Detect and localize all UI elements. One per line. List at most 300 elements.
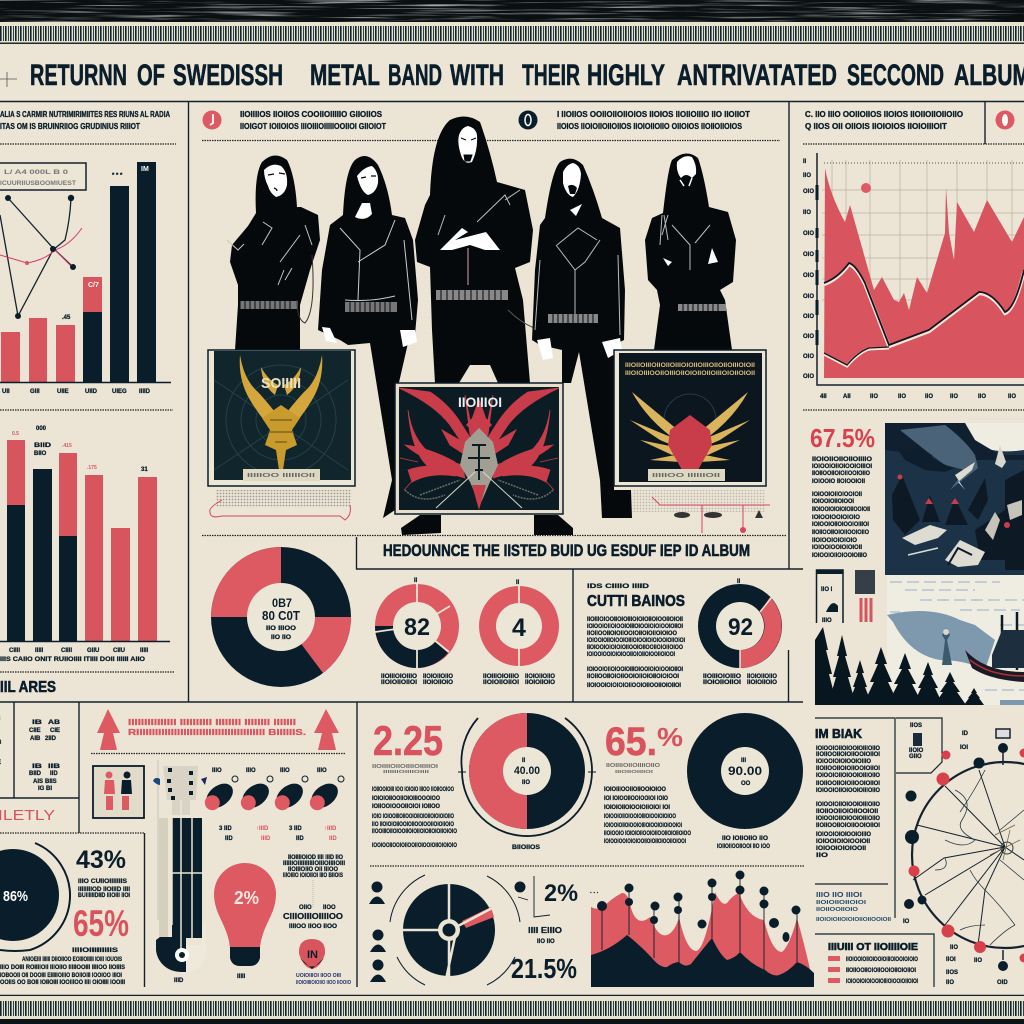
chart: donut 92: IIOIOIIOIIO xyxy=(747,674,777,680)
icon: crosshair xyxy=(0,72,17,87)
small stat cells: IB xyxy=(32,764,43,770)
album cover 1: gold: IIIIIOO IIIIIIOII xyxy=(247,473,316,479)
album cover 2: red: IIOIIIOI xyxy=(458,394,502,410)
icons: guitar picks: ↑IIID xyxy=(324,826,337,832)
chart: lower left stacked bars xyxy=(0,426,170,663)
heading: lower left: IIL ARES xyxy=(0,679,56,696)
album cover 1: gold: SOIIIII xyxy=(261,375,301,392)
panel: lower right text: IIOIIOOIIOIOIIOOIOIIOI xyxy=(816,752,880,758)
icon: red note badge xyxy=(202,110,222,130)
stat: 2.25: IIOOIIIOIIOIOOIIOIOIIOIOIIOIOIIOIOIO xyxy=(372,829,457,835)
panel: lower left donut with stats xyxy=(0,843,130,986)
chart: lower left stacked bars: CIIII xyxy=(9,648,20,654)
icon: dark O badge xyxy=(518,110,538,130)
chart: split donut with arc: BIIOIIOS xyxy=(512,845,540,851)
title: ANTRIVATATED xyxy=(677,59,837,92)
chart: donut 4: IIOIOIIOIO xyxy=(525,680,555,686)
panel: lower left donut with stats: OOIIS OO BOII IOIIOIII IOOIIIOO IIII OIOIIII IOOIII xyxy=(0,980,125,986)
chart: large donut: 0B7 xyxy=(272,596,292,610)
title: HIGHLY xyxy=(587,59,665,92)
chart: top right area chart: IIO xyxy=(803,210,811,216)
chart: large donut: IIO IIIOO xyxy=(266,626,296,632)
icon: pick badge: IN xyxy=(307,949,318,961)
chart: top left bars with line overlay: C/7 xyxy=(88,282,99,289)
icons: guitar picks: 3 IID xyxy=(289,826,302,832)
text block: guitar notes: IIOIIIIOIOD IIII IIID IIO xyxy=(288,855,343,861)
icons: guitar picks: IIIO xyxy=(246,768,256,774)
chart: donut 82: IIOIOIIOIO xyxy=(423,680,453,686)
heading: second album banner: HEDOUNNCE THE IISTED BUID UG ESDUF IEP ID ALBUM xyxy=(383,541,750,560)
chart: top right area chart: OIO xyxy=(803,273,814,279)
panel: lower right text: IOIOOIOIIOIOOIOIIIOIIO xyxy=(816,773,880,779)
small stat cells: 2IID xyxy=(45,736,57,742)
legend box: IIOIIOOIIOIOIIOOIOIIOIOIIOI xyxy=(846,968,916,974)
icons: guitar picks: IIIO xyxy=(212,768,222,774)
chart: dark donut: IOIIOIIOOIIOOI IIO IOO xyxy=(717,844,770,850)
red labels under cover 1 xyxy=(210,490,351,520)
stat: 65%: IIOIOOIO IOIOIOIIOOIOIIOOIIOIOIIOIOO xyxy=(604,831,691,837)
stat: 65%: IOI IOIOOIIOOIOOIOI IOIO xyxy=(604,796,668,802)
chart: top right area chart: II xyxy=(803,159,807,165)
panel: lower right text: IIOIOIOIIOIOIOIIOIIOOIOII xyxy=(816,917,892,923)
panel: band members xyxy=(227,116,736,535)
text block: center captions and icons: IIOIGOT IOIIOIOS IIIOIIIOIIIIIOOIIOI GIIOIOT xyxy=(240,122,386,131)
small stat cells: IB xyxy=(32,720,43,726)
stat: 2.25: IOIO IOIOOIIIOIIOOIOIIOIOIIOIOIOIOIIO xyxy=(372,814,454,820)
title: SWEDISSH xyxy=(173,59,283,92)
chart: lower left stacked bars: 000 xyxy=(36,426,47,432)
small stat cells: AIS xyxy=(33,779,43,785)
panel text: Cutti Bainos: IIOIOOIOIOIOIOIIOOIOIIOOIIOIOIIOI xyxy=(587,683,681,689)
panel text: Cutti Bainos: IOIOOIOIIOIOOIOIIIOIOOIOIOIOOIOIIOI xyxy=(587,624,683,630)
small stat cells: AB xyxy=(48,720,61,726)
chart: dark donut xyxy=(687,713,803,850)
chart: top right area chart: OIO xyxy=(803,252,814,258)
chart: circular network map xyxy=(903,729,1024,986)
text block: top right intro xyxy=(805,110,963,131)
chart: circular network map: IIO xyxy=(974,958,982,964)
text block: guitar notes: IIIOIIIO IOIOIIOI IIIO BIIOIS xyxy=(283,873,343,879)
stat: 2.25: IOIIOOIOOOIIOIOI IOIIOO xyxy=(372,804,440,810)
chart: lower left stacked bars: BIIO xyxy=(34,451,47,457)
text block: center captions and icons: IIOIOS IIOIOIIOIIOIIOS IIOIOIIOIIO OIIOIOS IIOIIOIIOIOS xyxy=(557,122,743,131)
legend box: IIIUIII OT IIOIIIIOIE xyxy=(828,942,918,953)
text block: guitar notes: IIIIOO IIOO IIOO xyxy=(289,924,337,930)
chart legend box: L/ A4 000L B 0 xyxy=(4,170,69,176)
icon: two figures box xyxy=(93,766,144,818)
panel text: Cutti Bainos xyxy=(587,584,685,689)
chart: top left bars with line overlay: UIEG xyxy=(112,389,127,395)
chart: donut 82: IIOIIIOIOIIIO xyxy=(381,674,417,680)
chart: lower left stacked bars: IIIS CAIIO ONIT RUIIOIIII ITIIII DOII IIIIII AIIO xyxy=(0,657,145,663)
stat: 67.5%: IOIOOIOIIOIOOI xyxy=(812,499,854,505)
chart: donut 4 xyxy=(479,580,559,686)
chart: donut 82: IIOIOIIOIIOI xyxy=(381,680,417,686)
stat: 67.5%: IIOIIOOIIOIOIIOOIOIIO xyxy=(812,471,870,477)
icons: guitar picks: IID xyxy=(225,836,233,842)
chart: donut 4: IIOIOIIOIIO xyxy=(525,674,555,680)
chart: top right area chart: 4II xyxy=(820,394,827,400)
annotations under cover 3 xyxy=(632,490,770,533)
chart: lower left stacked bars: GIIU xyxy=(87,648,99,654)
title: OF xyxy=(137,59,165,92)
small stat cells: CIIE xyxy=(29,728,41,734)
stat: 67.5%: IIOIOOIOIOIOIOIIOOIOII xyxy=(812,507,870,513)
chart: donut 4: IIOIIIOIOIIIO xyxy=(483,674,519,680)
icons: people xyxy=(369,882,386,982)
halftone texture xyxy=(0,102,803,864)
panel text: Cutti Bainos: IIOIIIOIOOIIOIOIIIOIOIOIIOIOOIIOIOII xyxy=(587,617,683,623)
chart: top right area chart xyxy=(803,153,1024,400)
chart: large donut: IIO IIO xyxy=(271,635,291,641)
panel: lower right text: IIO xyxy=(816,853,828,859)
album cover 3: gold red: IIIOIIOIIIOIIOIIOIIIOIOIIOIIIOIIOIIOIIIOIOII xyxy=(625,363,755,369)
chart: circular network map: IIO xyxy=(946,980,954,986)
chart: top right area chart: IIO xyxy=(870,394,878,400)
illustration: dark battle landscape xyxy=(885,423,1024,575)
illustration: pine trees xyxy=(815,627,984,705)
panel: lower right text: IM BIAK xyxy=(815,726,863,741)
panel: lower right text: IIOIIOOIIOIOIIOOIOIIOI xyxy=(816,823,880,829)
chart: top left bars with line overlay xyxy=(0,162,171,395)
chart: split donut with arc: II xyxy=(522,758,526,764)
text block: top left intro: ALIA S CARMIR NUTRIMIRIMIITES RES RIUNS AL RADIA xyxy=(0,110,170,119)
panel: lower left donut with stats: IIIO DOIII ROIIIIOII IIIOIIO IIIIIOOIII IIIIOO IIOIIIS xyxy=(0,965,125,971)
chart: split donut with arc: 40.00 xyxy=(514,765,540,777)
stat: 65%: IOIOOIOIIOIOOIOIIIOIOOIOIOIOOIOI xyxy=(604,823,682,829)
title: SECCOND xyxy=(847,59,944,92)
chart: top right area chart: OIO xyxy=(803,294,814,300)
icon: light bulb: IIIII xyxy=(237,974,246,980)
icon: light bulb xyxy=(214,863,276,980)
band member 4 xyxy=(532,159,632,518)
text block: guitar notes: IIIIIIOIIIIIIIIIIOIIIOIIIIOIII xyxy=(283,861,345,867)
red text heading xyxy=(128,717,306,737)
panel: lower left donut with stats: BUIIIIIIDIID IIIOIII IIOI xyxy=(78,893,130,899)
panel text: Cutti Bainos: IIOIOOIOIOIOIOIIOOIOIIOOIIOIOIIOIOO xyxy=(587,645,683,651)
bottom barcode border xyxy=(0,996,1024,1019)
icon: guitar: IIID xyxy=(174,978,184,984)
stat: 65% xyxy=(604,720,691,845)
chart: circular network map: OID xyxy=(997,980,1008,986)
band member 5 xyxy=(645,153,736,350)
small figure card: IIOIO xyxy=(909,748,924,754)
text block: guitar notes: CIIIOIIIOIIIIOO xyxy=(283,912,343,921)
icon: light bulb: 2% xyxy=(234,888,259,908)
small figure card: GIIO xyxy=(909,754,922,760)
panel: lower right text: IIOIOIIOIIOIOI xyxy=(816,900,867,906)
panel: lower right text: IIOIIOOIIOIOIIOOIOIIOI xyxy=(816,766,880,772)
title: THEIR xyxy=(522,59,580,92)
small figure card: IIOS xyxy=(910,723,922,729)
stat: 67.5% xyxy=(810,423,875,559)
stat: 2.25: IIOIIIIOIIOIIIIOIIIIIOI xyxy=(372,764,439,770)
title xyxy=(30,59,1024,92)
stat: 2.25: IIIIIIIOIIIIOIIII xyxy=(383,769,429,774)
panel: lower right text: IOIOOIOIOIOOIOIIIO xyxy=(816,759,871,765)
panel: lower left donut with stats: IIIIIIIIOD IIOIIID IIII xyxy=(78,887,130,893)
stat: 65%: IIOIIIIOIIOIIIIOIIO xyxy=(606,763,660,769)
stats: 2% and 21.5% xyxy=(511,876,578,984)
chart: split donut with arc xyxy=(458,713,596,851)
panel text: Cutti Bainos: IIOIIOOIIOIOIIOOIOIIOIOIIOIOIOO xyxy=(587,631,677,637)
chart: top left bars with line overlay: IIIID xyxy=(139,389,151,395)
stat: 65%: IIIOIIOIIIIOI xyxy=(615,769,653,774)
chart: top left bars with line overlay: UIIE xyxy=(57,389,69,395)
small figure card xyxy=(896,718,942,773)
stat: 67.5%: IOIOOIOIIOIOOIOIIIOI xyxy=(812,464,872,470)
stat: 2.25: IIO IIOIOIOIIOOIOIIOOIOOIIOIOIIOIO xyxy=(372,822,454,828)
icon: red badge xyxy=(996,110,1014,130)
stat: 65%: IOIOOIOOIOIOIOOIIOIOIIOIOOIIOIOOI xyxy=(604,839,686,845)
legend box: IIOIOOIOIIOIOOIOIIIOIOOIOIOIO xyxy=(846,957,918,963)
text block: center captions and icons: I IIOIIOS OOIIOIIOIIOIOS IIOIOS IIOIIOIIIO IIO IIOIIOT xyxy=(557,110,750,119)
chart: top left bars with line overlay: .45 xyxy=(62,315,71,321)
stat: 67.5%: IOIOOIOIIOIOOIOII xyxy=(812,492,862,498)
stat: 65%: IOIOIOIIOIOOIOIIOIOI IOI xyxy=(604,805,670,811)
icon: pick badge: UOIOIIIOI IIOO OIII xyxy=(296,973,342,979)
panel: lower right text: IIIO IIO IIIOI xyxy=(816,892,862,899)
album cover 3: gold red: IIIIIOO IIIIIIOII xyxy=(652,473,721,479)
small stat cells: AIB xyxy=(30,736,41,742)
legend box xyxy=(815,934,934,987)
title: WITH xyxy=(450,59,504,92)
chart: top right area chart: OIO xyxy=(803,354,814,360)
stat: 65%: IOIOIIIOOIIOIIOOIOIOO xyxy=(604,787,666,793)
panel: lower right text: IOIOOIOIIOIOOIOIIIOIIO xyxy=(816,816,880,822)
icons: guitar picks: IIIO xyxy=(280,768,290,774)
icon: pick badge xyxy=(296,939,351,986)
panel text: Cutti Bainos: IOIOOIOIIOIOOIOIIIOIOOIOIOIOOIOIIOIOI xyxy=(587,638,685,644)
chart: mountain area with pins: . . . xyxy=(590,889,599,895)
chart: circular network map: IOI xyxy=(960,745,968,751)
small stat cells: IID xyxy=(50,771,58,777)
icons: guitar picks: 3 IID xyxy=(219,826,232,832)
small poster icon xyxy=(816,570,875,624)
chart: top left bars with line overlay: GIII xyxy=(30,389,40,395)
small stat cells: BIID xyxy=(29,771,42,777)
chart: donut 4: II xyxy=(516,580,520,586)
panel text: Cutti Bainos: IIOIIOOIIOIOIIOOIOIIOIOIIOIOIOOI xyxy=(587,674,679,680)
stats: 2% and 21.5%: IIO IIO xyxy=(537,939,555,945)
chart: large donut xyxy=(211,547,351,687)
chart: lower left stacked bars: IIIII xyxy=(140,648,149,654)
chart: donut 92 xyxy=(698,579,782,686)
panel: lower right text: IOIOOIOIIOIOOIOIIIOIIO xyxy=(816,788,880,794)
text block: top right intro: Q IIOS OII OIIOIS IIOIOIOS IIOIOIIIOIT xyxy=(805,122,947,131)
chart: donut 92: IIOIIIOIOIIIO xyxy=(703,674,741,680)
chart: top left bars with line overlay: * * * xyxy=(112,173,123,179)
panel: lower left donut with stats: ANIOEIII IIIIII DIIOIIOO EOIIIOIIIII IOIII IOUOIS xyxy=(22,957,122,963)
legend box: IOIOOIOIOIOOIOIIIOIOOIOIIOIOI xyxy=(846,979,918,985)
chart: lower left stacked bars: .175 xyxy=(87,465,97,471)
icons: guitar picks: IIIO xyxy=(317,768,327,774)
panel: lower left donut with stats: IIIIOIIIIIIIIIS xyxy=(72,948,118,954)
chart: top right area chart: OIO xyxy=(803,374,814,380)
text block: top right intro: C. IIO IIIO OOIIOIIOS IIOIOS IIOIIOIIOIIOIIO xyxy=(805,110,963,119)
stats: 2% and 21.5%: IIII EIIIO xyxy=(528,926,562,935)
chart: top left bars with line overlay: IM xyxy=(141,166,149,173)
text block: guitar notes: IIOO xyxy=(323,905,336,911)
panel: lower left donut with stats: IOBOOII OII DOOIII EIIIIIOIIIO BOIIOIII IOOIOO IIIOI xyxy=(0,973,122,979)
chart: top right area chart: IIO xyxy=(950,394,958,400)
chart: donut 82 xyxy=(375,578,459,686)
chart: lower left stacked bars: 31 xyxy=(141,467,148,473)
panel text: Cutti Bainos: IOIOOIOIIOIOOIOIIIOIOOIOIOIOOIOIIOI xyxy=(587,667,683,673)
chart: top right area chart: IIO xyxy=(978,394,986,400)
album cover 2: red xyxy=(395,383,563,514)
band member 3 xyxy=(401,116,573,535)
stat: 67.5%: IIOIOOIOIOIOIO xyxy=(812,538,857,544)
chart: donut 92: II xyxy=(737,579,741,585)
illustration: sea with ship xyxy=(887,575,1024,705)
icons: guitar picks: IID xyxy=(329,836,337,842)
text block: top left intro xyxy=(0,110,170,131)
stat: 2.25: IOIIOOIOIII IOO IOIOIO IIIOO IIOIIOOIOO xyxy=(372,787,454,793)
text block: guitar notes: OIIO xyxy=(299,905,312,911)
stat: 67.5%: IIOIIOOIIOIOIIOOIOIIO xyxy=(812,530,869,536)
chart: split donut with arc: IIO xyxy=(522,780,530,786)
stat: 65%: % xyxy=(657,722,683,752)
chart: dark donut: III xyxy=(741,758,746,764)
chart: circular network map: IIO xyxy=(950,945,958,951)
chart legend box xyxy=(0,163,86,190)
album cover 1: gold xyxy=(208,350,355,486)
album cover 3: gold red: IIIOIOIIIOOIIOIIIOIIOIOIIOIIOIIIOIOIIOIOII xyxy=(625,371,755,377)
chart: top right area chart: OIO xyxy=(803,314,814,320)
bottom dark edge xyxy=(0,1019,1024,1024)
chart: donut 4: IIOIOIIOIIOI xyxy=(483,680,519,686)
icon: red arrows xyxy=(97,709,339,750)
small stat cells: IIB xyxy=(48,764,61,770)
chart: lower left stacked bars: 0.5 xyxy=(12,431,19,437)
stat: 67.5%: IOIOOIOOIOIOIO xyxy=(812,515,860,521)
chart: lower left stacked bars: IIIII xyxy=(35,648,44,654)
chart: lower left stacked bars: BIID xyxy=(34,443,52,449)
chart: lower left stacked bars: .415 xyxy=(62,443,72,449)
panel text: Cutti Bainos: IDS CIIIIO IIIID xyxy=(587,584,650,590)
panel: lower right text: IIOIIOOIIOIOIIOOIOIIOI xyxy=(816,781,880,787)
chart: lower left stacked bars: CIIU xyxy=(113,648,125,654)
chart: circular network map: IO xyxy=(903,919,910,925)
chart: top right area chart: IIO xyxy=(925,394,933,400)
small stat cells: BIIS xyxy=(45,779,57,785)
chart: top right area chart: OIO xyxy=(803,334,814,340)
panel text: Cutti Bainos: CUTTI BAINOS xyxy=(587,593,685,610)
chart: donut 82: II xyxy=(414,578,418,584)
text block: guitar notes xyxy=(283,855,345,930)
icons: guitar picks: IIID xyxy=(261,836,271,842)
stat: 2.25: 2.25 xyxy=(373,717,443,764)
panel: guitar infographic xyxy=(93,709,351,986)
chart: top left bars with line overlay: UIID xyxy=(85,389,98,395)
icon: pick badge: IIOIOIIIIOIOIIO IIOO IIOOIO xyxy=(296,980,351,986)
stat: 65%: 65. xyxy=(605,720,657,764)
stats: 2% and 21.5%: 2% xyxy=(544,880,578,907)
chart: donut 92: IIOIOIIOIIOI xyxy=(703,680,741,686)
chart: donut 82: IIOIOIIOIIO xyxy=(423,674,453,680)
text block: guitar notes: IIOIIIOIIO OII IIIOO xyxy=(288,867,338,873)
icons: guitar picks xyxy=(200,768,344,842)
chart: circular network map: IIOS xyxy=(946,970,958,976)
text block: center captions and icons xyxy=(202,110,750,131)
stats: 2% and 21.5%: 21.5% xyxy=(511,953,577,984)
panel: lower right text: IIOIIOOIIOIOIIOOIOII xyxy=(816,809,878,815)
panel: lower right text: IOIOOIOIOIOOII xyxy=(816,846,866,852)
stat: 67.5%: IOIOOIOIIOIOOIOIIIOI xyxy=(812,522,869,528)
panel: lower right text: IOIOOIOIIOIOOIOIIIOIIO xyxy=(816,746,880,752)
chart: dark donut: OO xyxy=(741,781,751,787)
small stat cells: IG BI xyxy=(38,786,52,792)
chart: top right area chart: IIO xyxy=(898,394,906,400)
chart: donut 4: 4 xyxy=(512,614,526,642)
stat: 2.25: IOIOIOIIOOIIOIOIIIOOOIOO xyxy=(372,796,440,802)
chart: lower left stacked bars: CIIII xyxy=(61,648,72,654)
stat: 67.5%: IOIOOIOOIOIOIOII xyxy=(812,545,862,551)
panel: lower right text: IIOIIOOIIOIO xyxy=(816,907,858,913)
red text heading: IIIIIIIIIIIIIII IIIIIIIIII IIIIIIII IIIIIIII IIIIIII xyxy=(128,717,296,727)
small stat cells xyxy=(0,716,61,792)
chart: donut 92: IIOIOIIOIO xyxy=(747,680,777,686)
stat: 2.25 xyxy=(372,717,457,849)
stat: 67.5%: IIOIOIIOIIOIIOIIIIO xyxy=(812,457,872,463)
icons: guitar picks: ↑IIID xyxy=(256,826,269,832)
icons: guitar picks: IID xyxy=(296,836,304,842)
band member 2 xyxy=(318,156,418,518)
small poster icon: IIIO xyxy=(822,618,832,624)
chart: circular network map: IIOI xyxy=(946,957,956,963)
stat: 67.5%: IOIOOIOIIOIOOIOIIIO xyxy=(812,553,867,559)
panel: lower left donut with stats: 86% xyxy=(3,888,28,905)
panel: lower right text: IOIOOIOIOIOOIOIIIO xyxy=(816,832,871,838)
text block: top left intro: ITAS OM IS BRUINRIIOG GRUDINIUS RIIIOT xyxy=(0,122,140,131)
panel: lower left donut with stats: 65% xyxy=(73,903,129,944)
stat: 65%: IOIOOIOIIOIOOIOIIIOIOOIOIOIOO xyxy=(604,814,676,820)
top brushed band xyxy=(0,0,1024,22)
title: METAL xyxy=(310,59,380,92)
panel: lower left donut with stats: IIIO CUIIOIIIIIIIS xyxy=(78,879,127,885)
chart: top right area chart: OIO xyxy=(803,189,814,195)
chart: donut 82: 82 xyxy=(404,614,430,641)
chart: top left bars with line overlay: UII xyxy=(2,389,10,395)
chart: dark donut: 90.00 xyxy=(728,764,762,778)
panel: lower right text: IOIOOIOIOIOOIOII xyxy=(816,839,870,845)
chart legend box: ICUURIIUSBOOMIUEST xyxy=(0,181,76,187)
album cover 3: gold red xyxy=(614,350,766,486)
text block: center captions and icons: IIOIIIIOS IIOIIOS COOIIOIIIIIO GIIOIIOS xyxy=(240,110,383,119)
stat: 67.5%: IOIOOIO IIOIOOIOII xyxy=(812,479,865,485)
band member 1 xyxy=(227,155,320,350)
chart: top right area chart: OIO xyxy=(803,231,814,237)
stat: 2.25: IOOIOOIIOOIOIIOOIIOIOOIOIIOIOIOIO xyxy=(372,843,457,849)
small stat cells: CIE xyxy=(50,728,60,734)
small poster icon: IIO I xyxy=(821,587,833,593)
top barcode border xyxy=(0,22,1024,45)
chart: donut 92: 92 xyxy=(728,614,753,641)
panel: lower left donut with stats: 43% xyxy=(76,846,126,874)
panel: lower right text xyxy=(815,718,895,923)
chart: segmented pie xyxy=(390,875,520,985)
title: BAND xyxy=(388,59,442,92)
red text heading: RIIIIIIIIIIIIIIIIIIIIIIIIIIIIIIIIIIIIIIIII BIIIIIIS. xyxy=(128,727,306,737)
chart: top right area chart: IIO xyxy=(1008,394,1016,400)
stat: 67.5%: 67.5% xyxy=(810,423,875,453)
chart: dark donut: IIO IOIIOIIO IIO xyxy=(722,836,768,842)
chart: top right area chart: IIO xyxy=(803,173,811,179)
chart: top right area chart: AII xyxy=(843,394,851,400)
title: RETURNN xyxy=(30,59,127,92)
panel text: Cutti Bainos: IOIOOIOOIOIOIOOIIOIOIIOIOOIIOIOOI xyxy=(587,652,675,658)
